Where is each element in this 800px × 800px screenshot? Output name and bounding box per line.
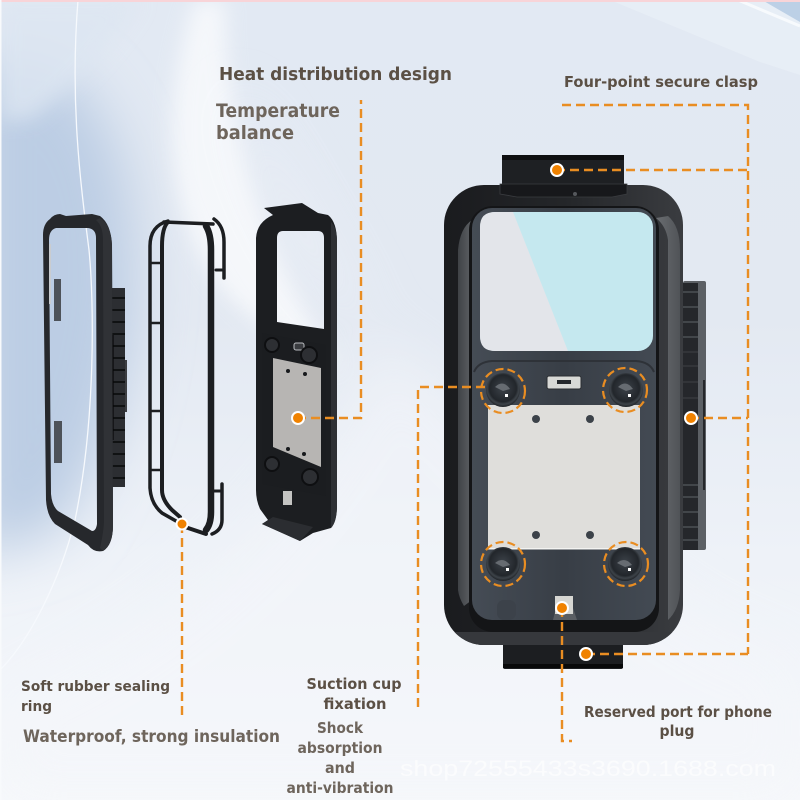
part: back plate tray <box>256 203 337 541</box>
label: soft rubber sealing ring: Soft rubber sealing <box>21 679 170 695</box>
case body <box>444 185 683 645</box>
part: outer frame with grip <box>43 214 127 551</box>
side grip <box>683 281 706 550</box>
part: soft rubber sealing ring <box>150 219 224 534</box>
label: shock absorption and anti-vibration: absorption <box>298 739 382 757</box>
plate holes <box>532 415 594 539</box>
suction cups <box>486 373 643 581</box>
label: temperature balance: Temperature <box>216 100 340 122</box>
label: shock absorption and anti-vibration: Shock <box>317 719 364 737</box>
port tab <box>553 596 577 620</box>
label: soft rubber sealing ring: ring <box>21 699 52 715</box>
label: shock absorption and anti-vibration: anti-vibration <box>286 779 394 797</box>
callout dots <box>176 164 697 660</box>
grip ribs <box>104 288 127 487</box>
label: heat distribution design: Heat distribution design <box>219 65 452 85</box>
mounting screws <box>265 338 318 485</box>
inner bevel <box>454 206 680 645</box>
window <box>480 212 653 351</box>
top clasp <box>502 155 624 186</box>
callout lines <box>182 100 748 741</box>
label: suction cup fixation: Suction cup <box>306 675 402 693</box>
heat plate <box>273 358 321 467</box>
small button <box>497 600 516 620</box>
top hinge <box>500 184 627 197</box>
USB connector <box>547 376 581 389</box>
label: shock absorption and anti-vibration: and <box>325 759 355 777</box>
label: suction cup fixation: fixation <box>324 695 386 713</box>
part: main case <box>440 155 706 669</box>
label: four-point secure clasp: Four-point secure clasp <box>564 73 758 91</box>
label: reserved port for phone plug: Reserved port for phone <box>584 703 772 721</box>
watermark: shop72555433s3690.1688.com <box>400 756 776 781</box>
heat plate <box>488 405 640 549</box>
bottom clasp <box>503 640 623 669</box>
label: temperature balance: balance <box>216 122 294 144</box>
plate holes <box>286 369 307 456</box>
label: waterproof, strong insulation: Waterproof, strong insulation <box>23 727 280 747</box>
USB slot <box>294 343 304 350</box>
suction cup highlight rings <box>481 368 648 586</box>
label: reserved port for phone plug: plug <box>660 722 694 740</box>
